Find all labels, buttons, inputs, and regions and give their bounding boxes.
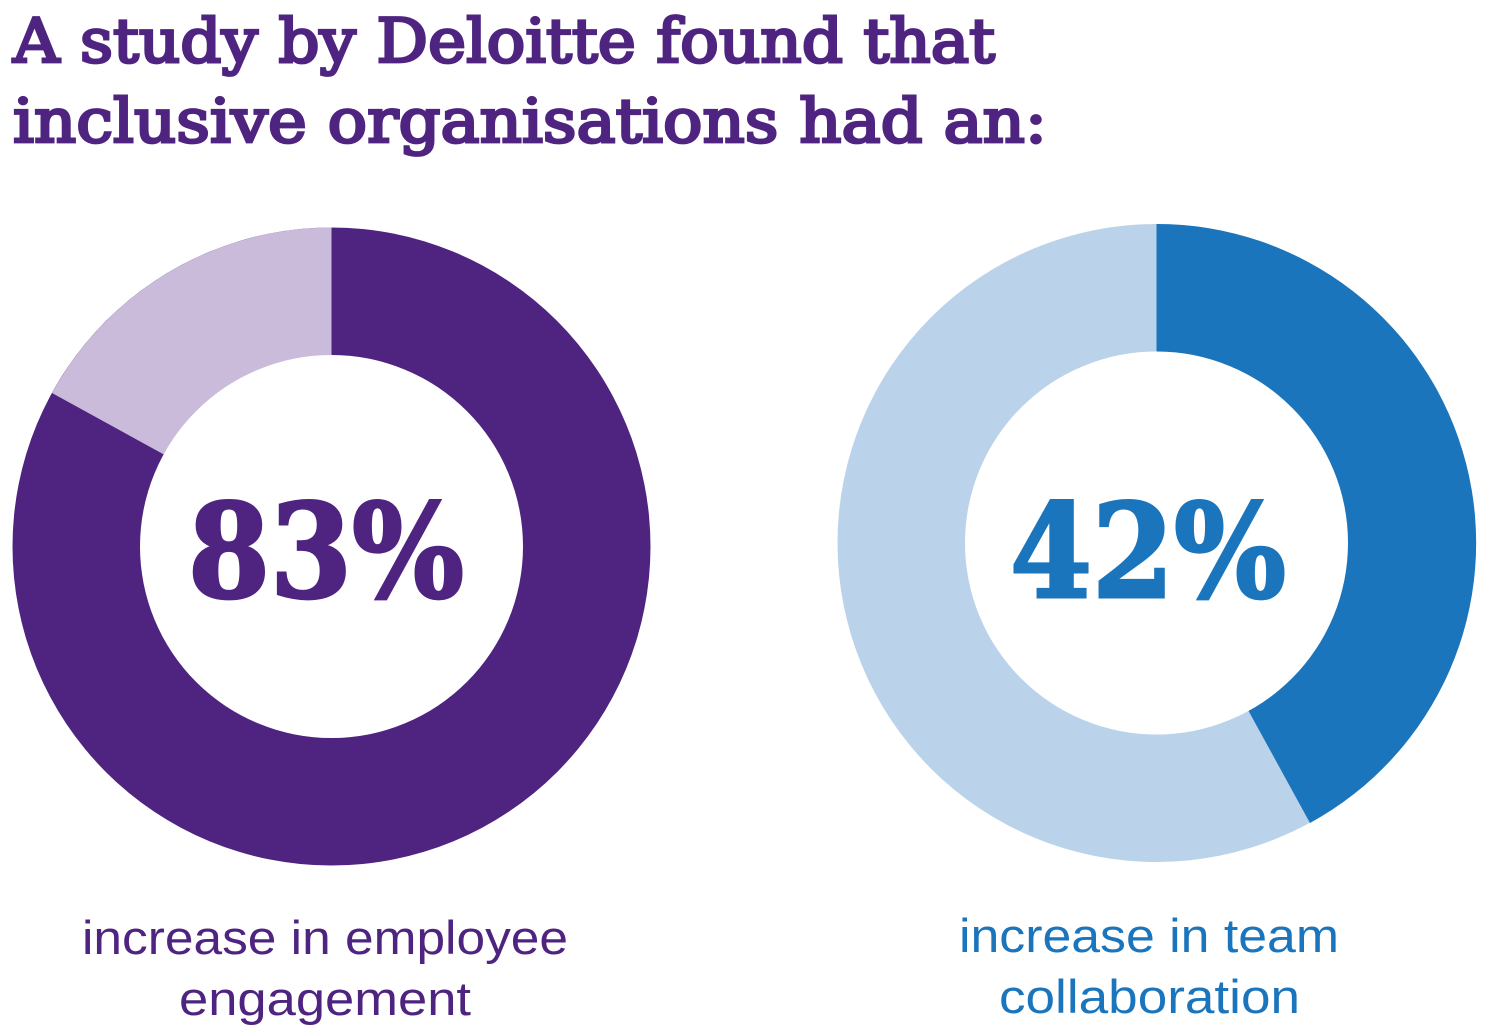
title: [12, 6, 1047, 157]
label: increase in employee engagement: increase in employee: [82, 911, 568, 964]
panel: team collaboration: [838, 224, 1476, 1023]
stat: 42%: 42%: [1010, 475, 1286, 628]
title: inclusive organisations had an:: [13, 86, 1047, 157]
label: increase in team collaboration: increase in team: [959, 909, 1339, 962]
label: increase in team collaboration: collaboration: [999, 970, 1300, 1023]
label: increase in employee engagement: engagement: [179, 972, 471, 1025]
label: increase in team collaboration: [959, 909, 1339, 1023]
stat: 83%: 83%: [188, 475, 464, 628]
donut chart: 83%: [12, 228, 650, 866]
panel: employee engagement: [12, 228, 650, 1025]
donut chart: 42%: [838, 224, 1476, 862]
title: A study by Deloitte found that: [12, 6, 996, 77]
label: increase in employee engagement: [82, 911, 568, 1025]
